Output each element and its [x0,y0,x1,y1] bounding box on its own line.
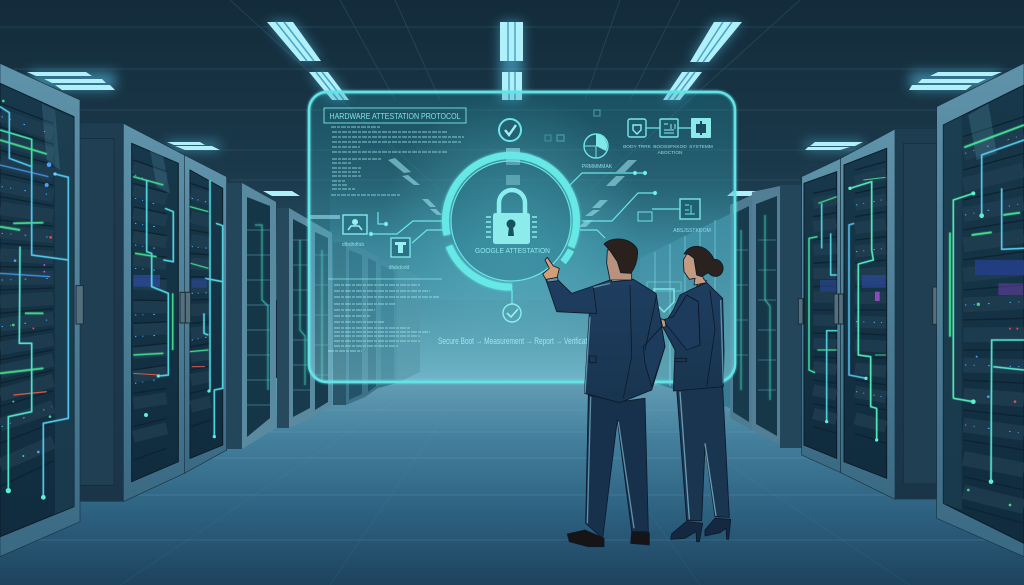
process flow text: Secure Boot → Measurement → Report → Verification [438,336,596,347]
man head [607,250,632,280]
rack door 2 [184,155,227,473]
code listing block [328,279,442,351]
man cuff [547,277,558,282]
light reflections in panel [310,148,637,227]
icon labels: BOOSSFKKOD [653,144,687,150]
back wall [330,170,730,382]
panel background [309,92,735,382]
man jacket [546,279,665,403]
icon: shield check [499,119,521,141]
circuit lines right [545,110,700,238]
people [543,239,731,547]
door handle rack 1 [76,286,83,324]
icon row [628,118,711,138]
panel border [309,92,735,382]
pie label: PRMMMMAK [582,164,613,170]
far server racks right [640,185,802,448]
icon: padlock [486,190,537,244]
woman heels [671,518,731,542]
rack door 1 right [802,158,841,473]
server racks left foreground [0,63,227,557]
floor [0,378,1024,585]
circuit lines left [369,212,443,243]
door handles right [798,287,940,324]
icon labels [623,144,713,156]
icon left 2 [391,238,410,257]
icon labels: ABOCTION [657,150,683,156]
rack side panel right [895,129,937,499]
door handles [180,292,191,323]
far server racks left [227,183,420,449]
icon labels: SYSTEMM [689,144,713,150]
icon left 1 [343,215,367,234]
heading box: HARDWARE ATTESTATION PROTOCOL [330,111,461,121]
man trousers [586,395,648,538]
rack door 1 [123,123,184,502]
woman head [683,254,707,285]
man hand [543,257,559,281]
rack 1 right [937,63,1024,557]
central lock dial [445,155,576,287]
protocol text block [331,127,464,195]
man shoes [567,530,649,547]
heading box [324,108,466,123]
ceiling lights [27,22,1002,196]
woman hand [661,318,666,327]
woman jacket [663,283,724,391]
dial label: GOOGLE ATTESTATION [475,248,550,255]
pie chart icon [584,134,608,158]
rack side panel [80,123,123,502]
woman [661,246,731,542]
server racks right foreground [798,63,1024,557]
left labels: dfabdodd [389,265,410,271]
check badge [503,290,521,322]
rack 1 [0,63,80,557]
small shield on panel behind people [647,282,681,312]
rack door 2 right [841,129,895,499]
left labels [342,242,410,271]
left labels: dtbdhdfab [342,242,364,248]
right small label: ABSJSSTKOOM [673,228,711,234]
icon labels: BODY TRRK [623,144,652,150]
hologram panel [309,92,735,382]
man [543,239,665,547]
ceiling [0,0,1024,300]
woman trousers [677,387,729,521]
